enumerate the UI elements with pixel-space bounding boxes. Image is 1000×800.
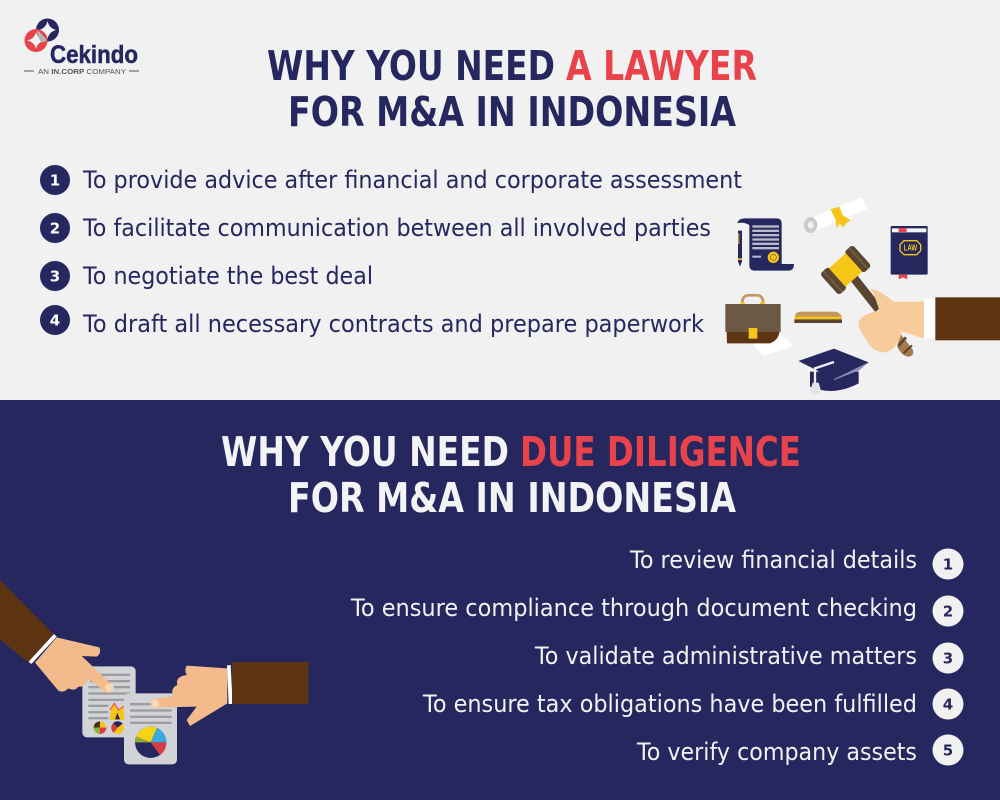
- heading: why you need a lawyer: FOR M&A IN INDONESIA: [288, 88, 736, 136]
- item 5: 5: [943, 742, 953, 760]
- icon: scroll and pen: [737, 218, 794, 271]
- item 4: 4: [50, 312, 60, 330]
- item 3: To negotiate the best deal: [82, 262, 373, 290]
- item 3: 3: [943, 650, 953, 668]
- icon: gavel: [820, 245, 913, 357]
- heading: why you need due diligence: FOR M&A IN INDONESIA: [288, 474, 736, 522]
- heading: why you need due diligence: WHY YOU NEED: [221, 428, 509, 476]
- list: lawyer reasons: [40, 165, 742, 338]
- list: due diligence reasons: [350, 546, 963, 766]
- icon: law book: [891, 226, 928, 279]
- icon: right hand and sleeve: [151, 662, 309, 726]
- item 2: To ensure compliance through document checking: [350, 594, 917, 622]
- illustration: legal items and gavel: [725, 197, 1000, 395]
- heading: why you need a lawyer: WHY YOU NEED: [267, 42, 555, 90]
- item 4: To draft all necessary contracts and prepare paperwork: [82, 310, 704, 338]
- item 3: To validate administrative matters: [534, 642, 917, 670]
- item 5: To verify company assets: [636, 738, 917, 766]
- item 3: 3: [50, 268, 60, 286]
- icon: law book: LAW: [904, 243, 918, 253]
- logo: Cekindo: Cekindo: [50, 41, 138, 69]
- logo: Cekindo: AN IN.CORP COMPANY: [38, 69, 126, 76]
- item 2: 2: [50, 220, 60, 238]
- heading: why you need due diligence: DUE DILIGENCE: [520, 428, 801, 476]
- item 1: 1: [50, 172, 60, 190]
- illustration: hands reviewing documents: [0, 580, 309, 764]
- item 4: 4: [943, 696, 953, 714]
- item 1: To review financial details: [629, 546, 917, 574]
- icon: hand and sleeve: [858, 289, 1000, 353]
- heading: why you need a lawyer: A LAWYER: [566, 42, 757, 90]
- heading: why you need a lawyer: [267, 42, 757, 136]
- icon: left hand and sleeve: [0, 580, 114, 693]
- icon: gavel block: [794, 312, 842, 323]
- item 2: 2: [943, 602, 953, 620]
- icon: briefcase: [725, 295, 794, 356]
- logo: Cekindo: [24, 18, 139, 76]
- item 4: To ensure tax obligations have been fulfilled: [422, 690, 917, 718]
- item 1: 1: [943, 556, 953, 574]
- heading: why you need due diligence: [221, 428, 801, 522]
- document: left report: [82, 666, 136, 737]
- item 1: To provide advice after financial and corporate assessment: [82, 166, 742, 194]
- icon: graduation cap: [798, 349, 869, 395]
- item 2: To facilitate communication between all involved parties: [82, 214, 711, 242]
- document: right report with pie chart: [124, 693, 177, 764]
- icon: diploma: [804, 197, 867, 233]
